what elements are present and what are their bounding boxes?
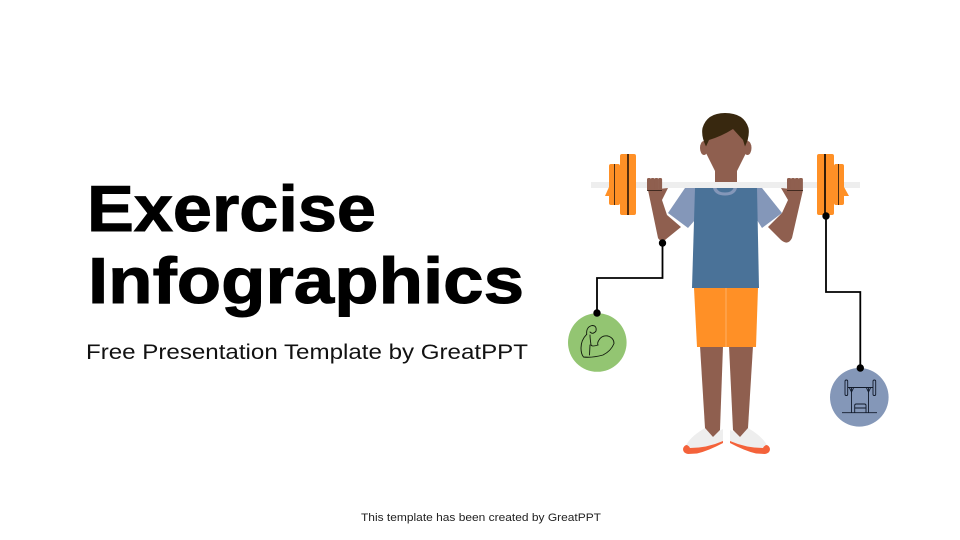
shirt [692, 188, 759, 288]
legs [700, 346, 753, 437]
icon: flexed bicep [568, 313, 627, 372]
callout: arm dot [659, 239, 666, 247]
hands gripping bar [647, 178, 803, 191]
shorts [694, 288, 758, 347]
title: Infographics [88, 244, 524, 317]
footer credit: This template has been created by GreatPPT [361, 512, 601, 524]
connector cap [593, 309, 601, 317]
connector cap [857, 364, 864, 372]
neck and head [700, 113, 752, 184]
arms [648, 188, 803, 243]
barbell inner collar line [824, 154, 826, 215]
barbell [591, 154, 860, 215]
title [87, 172, 524, 317]
title: Exercise [87, 172, 376, 245]
callout: barbell connector [826, 216, 860, 368]
icon: bench press [830, 368, 889, 427]
sleeves [668, 188, 782, 228]
subtitle: Free Presentation Template by GreatPPT [86, 341, 528, 364]
callout: arm connector [597, 243, 662, 313]
shoes [683, 428, 770, 454]
callout: barbell dot [822, 212, 830, 220]
athlete figure [591, 113, 860, 454]
